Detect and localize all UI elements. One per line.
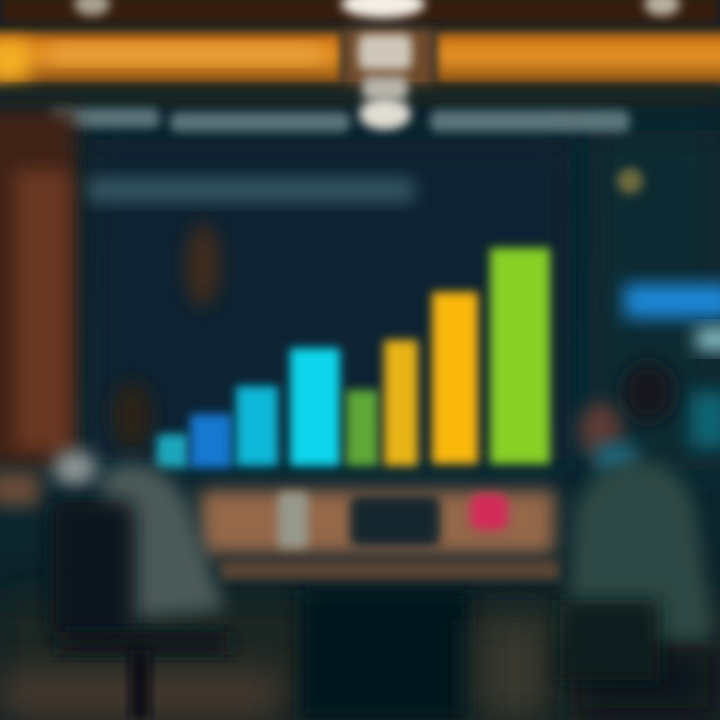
brick wall left <box>0 110 76 465</box>
person right <box>560 362 715 680</box>
table <box>0 472 560 580</box>
small yellow light <box>617 168 643 194</box>
blurred headline strip <box>50 108 630 132</box>
bar chart <box>156 248 550 468</box>
person left <box>50 381 230 720</box>
right side blue screen <box>624 284 720 448</box>
bar: cyan <box>236 386 278 466</box>
bar: lime <box>490 248 550 464</box>
bar: light blue small <box>156 434 188 468</box>
faint brown reflection <box>185 223 221 307</box>
pink object on table <box>470 494 508 530</box>
bar: green small <box>346 390 378 466</box>
laptop on table <box>350 496 440 546</box>
blurred subheading strip <box>85 178 415 202</box>
ceiling with orange light band <box>0 0 720 102</box>
pale cup on table <box>278 492 308 548</box>
bar: bright cyan <box>290 348 340 466</box>
bar: amber <box>432 292 478 464</box>
ceiling lights <box>74 0 680 130</box>
bar: yellow <box>384 340 418 466</box>
bar: blue <box>190 414 232 468</box>
